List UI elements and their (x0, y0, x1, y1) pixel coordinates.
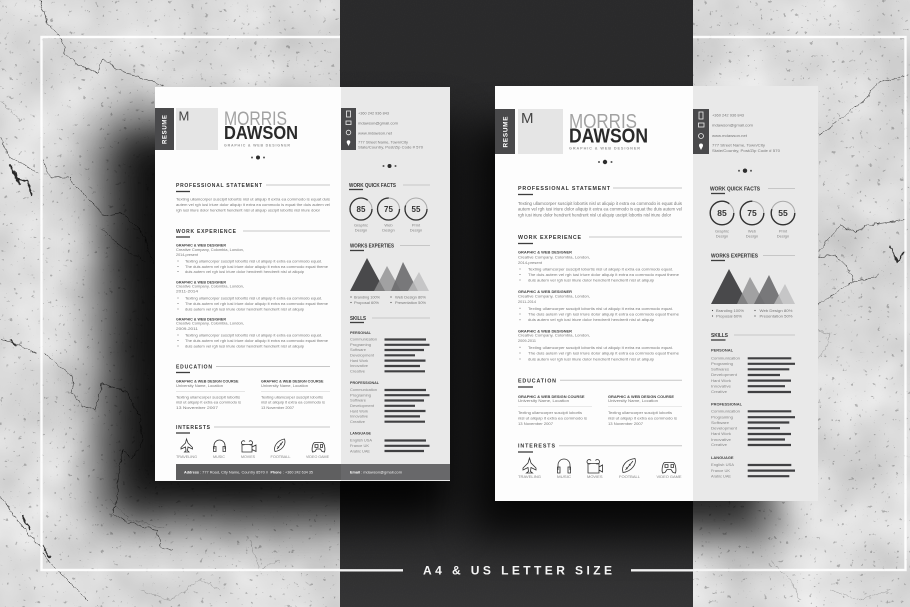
photo placeholder (176, 108, 218, 150)
professional skills: Hard Work (350, 408, 368, 413)
icon: video camera (241, 441, 256, 452)
job 2: Texting ullamcorper suscipit lobortis nisl ut aliquip it extra ea commodo equat. (185, 296, 322, 300)
photo placeholder: M (178, 108, 189, 124)
personal skills (711, 348, 795, 394)
contact tab (341, 108, 356, 150)
gauge 55 (405, 198, 427, 232)
gauge 55: 55 (412, 205, 421, 214)
professional skills: Creative (350, 419, 366, 424)
work quick facts (349, 183, 430, 232)
skills (711, 333, 795, 478)
personal skills: PERSONAL (350, 330, 372, 335)
professional skills: Innovative (350, 414, 369, 418)
pagination dots (738, 168, 752, 173)
job 1: GRAPHIC & WEB DESIGNER (518, 250, 572, 254)
footer bar: Email (350, 470, 360, 474)
section: professional statement: PROFESSIONAL STATEMENT (176, 183, 262, 189)
contact details: www.mdawson.net (712, 133, 748, 138)
section: professional statement: rgh iusi iriure dolor hendrerit hendrerit nisl ut aliquip uscipit lobortis nisl iriure dolor (518, 212, 672, 218)
icon: headphones (214, 440, 226, 452)
gauge 75: Design (746, 234, 758, 238)
gauge 85: Graphic (354, 222, 368, 228)
caption: A4 & US letter size: A4 & US LETTER SIZE (423, 564, 612, 578)
name: GRAPHIC & WEB DESIGNER (569, 146, 640, 150)
section: education: Texting ullamcorper suscipit lobortis (518, 410, 582, 415)
name: MORRIS (569, 110, 637, 133)
section: professional statement: rgh iusi iriure dolor hendrerit hendrerit nisl ut aliquip uscipit lobortis nisl iriure dolor (176, 208, 321, 212)
personal skills: Hard Work (350, 358, 368, 363)
language skills: English USA (350, 438, 372, 442)
section: work experience (518, 235, 682, 362)
job 1: Texting ullamcorper suscipit lobortis nisl ut aliquip it extra ea commodo equat. (185, 258, 322, 264)
job 2: duis autem vel rgh iusi iriure dolor hendrerit hendrerit nisl ut aliquip (528, 317, 655, 322)
expertise list: Web Design 80% (760, 308, 793, 313)
gauge 75: 75 (747, 208, 757, 218)
skills: SKILLS (711, 333, 729, 339)
job 3 (176, 316, 329, 348)
job 1: The duis autem vel rgh iusi iriure dolor aliquip it extra ea commodo equat theme (528, 272, 680, 277)
interest labels: MOVIES (587, 474, 603, 479)
personal skills: Creative (711, 389, 728, 394)
section: education: 13 November 2007 (176, 405, 219, 410)
pagination dots (598, 160, 612, 164)
name: DAWSON (224, 122, 298, 143)
professional skills: Development (711, 426, 738, 430)
resume tab: RESUME (502, 116, 510, 148)
job 2 (518, 289, 680, 322)
work quick facts (710, 186, 795, 238)
professional skills: Software (711, 420, 730, 425)
drop shadow: left page (104, 122, 454, 522)
resume tab (495, 109, 515, 154)
interest labels: VIDEO GAME (306, 454, 329, 459)
job 2 (176, 280, 329, 312)
gauge 85: 85 (717, 208, 727, 218)
interest labels: TRAVELING (176, 454, 197, 459)
job 1: duis autem vel rgh iusi iriure dolor hendrerit hendrerit nisl ut aliquip (185, 269, 305, 274)
section: professional statement (518, 186, 682, 218)
section: professional statement: autem vel rgh iusi iriure dolor aliquip it extra ea commodo is equat the duis autem vel (518, 206, 682, 212)
job 2: Texting ullamcorper suscipit lobortis nisl ut aliquip it extra ea commodo equat. (528, 306, 673, 311)
job 3: duis autem vel rgh iusi iriure dolor hendrerit hendrerit nisl ut aliquip (528, 356, 655, 362)
footer bar: : +360 242 634 35 (283, 470, 314, 474)
interest labels: VIDEO GAME (656, 474, 682, 479)
name: MORRIS (224, 108, 287, 130)
professional skills: Innovative (711, 437, 732, 442)
job 2: Creative Company, Colombia, London, (518, 294, 590, 298)
job 1: The duis autem vel rgh iusi iriure dolor aliquip it extra ea commodo equat theme (185, 264, 329, 269)
works experties: WORKS EXPERTIES (350, 244, 395, 250)
job 3 (518, 328, 680, 362)
job 1: duis autem vel rgh iusi iriure dolor hendrerit hendrerit nisl ut aliquip (528, 278, 655, 282)
job 1: Creative Company, Colombia, London, (518, 254, 590, 260)
section: education: University Name, Location (176, 383, 223, 388)
gauge 55: Print (779, 228, 788, 234)
section: work experience: WORK EXPERIENCE (518, 235, 581, 241)
job 2: The duis autem vel rgh iusi iriure dolor aliquip it extra ea commodo equat theme (185, 301, 329, 306)
language skills: Arabic UAE (350, 448, 370, 454)
professional skills (711, 402, 795, 447)
gauge 85: Graphic (715, 228, 729, 234)
gauge 55: Design (777, 234, 789, 238)
gauge 75: Design (382, 228, 395, 232)
professional skills: PROFESSIONAL (711, 402, 743, 406)
job 3: Creative Company, Colombia, London, (176, 320, 244, 326)
section: education (518, 378, 682, 426)
mountain chart (711, 269, 795, 304)
section: professional statement: PROFESSIONAL STATEMENT (518, 186, 611, 192)
resume page: right (US letter) (495, 86, 818, 501)
icon: gamepad (312, 442, 325, 452)
gauge 85 (350, 198, 372, 232)
professional skills: Programing (711, 414, 733, 420)
work quick facts: WORK QUICK FACTS (710, 186, 761, 192)
expertise list: Proposal 60% (354, 300, 379, 305)
section: education: GRAPHIC & WEB DESIGN COURSE (176, 378, 239, 384)
section: education: nisl ut aliquip it extra ea commodo is (608, 416, 677, 420)
section: education: GRAPHIC & WEB DESIGN COURSE (608, 394, 674, 399)
icon: plane (181, 439, 192, 452)
interest labels: MUSIC (213, 454, 225, 459)
section: education: EDUCATION (176, 364, 212, 370)
personal skills: Programing (711, 361, 733, 366)
icon: headphones (558, 459, 570, 473)
section: work experience: WORK EXPERIENCE (176, 229, 237, 235)
language skills: France UK (711, 468, 730, 473)
icon: video camera (587, 460, 602, 473)
contact details (358, 110, 424, 150)
gauge 75: Web (384, 222, 393, 228)
job 2: The duis autem vel rgh iusi iriure dolor aliquip it extra ea commodo equat theme (528, 312, 680, 316)
section: professional statement: Texting ullamcorper suscipit lobortis nisl ut aliquip it extra ea commodo is equat duis (176, 196, 330, 202)
job 1: 2014-present (176, 252, 199, 257)
section: interests (518, 444, 682, 479)
section: education: University Name, Location (518, 398, 569, 403)
job 3: GRAPHIC & WEB DESIGNER (176, 316, 226, 322)
contact details: www.mdawson.net (358, 130, 393, 136)
language skills: LANGUAGE (711, 455, 734, 460)
job 3: duis autem vel rgh iusi iriure dolor hendrerit hendrerit nisl ut aliquip (185, 344, 305, 348)
expertise list: Branding 100% (716, 308, 744, 313)
gauge 55 (771, 201, 795, 238)
personal skills: Hard Work (711, 378, 731, 383)
works experties (350, 244, 430, 305)
expertise list (712, 308, 793, 318)
job 2: GRAPHIC & WEB DESIGNER (518, 289, 572, 294)
section: education: GRAPHIC & WEB DESIGN COURSE (261, 378, 324, 384)
personal skills: Communication (350, 336, 377, 342)
icon: football (623, 458, 635, 472)
footer bar: : mdawson@gmail.com (361, 470, 403, 474)
language skills: Arabic UAE (711, 474, 731, 478)
personal skills: Development (711, 372, 738, 377)
gauge 85 (710, 201, 734, 238)
job 2: Creative Company, Colombia, London, (176, 284, 244, 288)
photo placeholder: M (521, 110, 534, 127)
section: education: 13 November 2007 (608, 421, 644, 426)
page background (495, 86, 818, 501)
language skills: LANGUAGE (350, 430, 371, 436)
contact details: 777 Street Name, Town/City (358, 140, 408, 144)
section: education: 13 November 2007 (261, 405, 295, 410)
job 3: Texting ullamcorper suscipit lobortis nisl ut aliquip it extra ea commodo equat. (185, 332, 322, 338)
section: education (176, 364, 330, 410)
interest labels (176, 454, 329, 459)
personal skills (350, 330, 430, 374)
works experties (711, 254, 795, 318)
gauge 75: Web (748, 228, 757, 234)
skills: SKILLS (350, 316, 367, 322)
section: work experience (176, 229, 330, 348)
contact details: State/Country, Post/Zip Code # 570 (712, 148, 781, 153)
language skills (350, 430, 430, 454)
language skills: France UK (350, 443, 369, 448)
contact tab (693, 109, 709, 154)
personal skills: Innovative (350, 363, 369, 368)
name: DAWSON (569, 126, 648, 148)
job 1: GRAPHIC & WEB DESIGNER (176, 242, 226, 248)
gauge 55: Design (410, 228, 422, 232)
personal skills: Innovative (711, 384, 732, 388)
work quick facts: WORK QUICK FACTS (349, 183, 397, 189)
job 3: The duis autem vel rgh iusi iriure dolor aliquip it extra ea commodo equat theme (528, 350, 680, 356)
contact details: +360 242 936 843 (358, 110, 390, 116)
contact details: State/Country, Post/Zip Code # 570 (358, 144, 424, 150)
gauge 85: 85 (357, 205, 366, 214)
personal skills: Creative (350, 368, 366, 374)
section: interests: INTERESTS (176, 425, 211, 431)
dark centre band (340, 0, 693, 607)
section: education: EDUCATION (518, 378, 556, 384)
mountain chart (350, 258, 429, 291)
job 1: Creative Company, Colombia, London, (176, 247, 244, 252)
footer bar: Address (184, 470, 200, 474)
gauge 85: Design (716, 234, 728, 238)
personal skills: Softwares (711, 366, 729, 372)
gauge 75: 75 (384, 205, 393, 214)
job 2: GRAPHIC & WEB DESIGNER (176, 280, 226, 284)
photo placeholder (518, 109, 563, 154)
section: professional statement: Texting ullamcorper suscipit lobortis nisl ut aliquip it extra ea commodo is equat duis (518, 201, 682, 206)
job 2: 2011-2014 (176, 288, 199, 294)
section: interests (176, 425, 330, 459)
pagination dots (251, 156, 265, 160)
section: professional statement: autem vel rgh iusi iriure dolor aliquip it extra ea commodo is equat the duis autem vel (176, 202, 330, 207)
job 1: Texting ullamcorper suscipit lobortis nisl ut aliquip it extra ea commodo equat. (528, 266, 673, 272)
job 3: 2009-2011 (518, 338, 537, 343)
gauge 85: Design (355, 228, 367, 232)
job 3: GRAPHIC & WEB DESIGNER (518, 328, 572, 334)
personal skills: Software (350, 347, 367, 352)
icon: gamepad (662, 462, 676, 473)
professional skills: Programing (350, 392, 371, 397)
professional skills: PROFESSIONAL (350, 380, 380, 385)
gauge 75 (378, 198, 400, 232)
professional skills: Creative (711, 442, 728, 447)
job 2: duis autem vel rgh iusi iriure dolor hendrerit hendrerit nisl ut aliquip (185, 306, 305, 312)
gauge 75 (740, 201, 764, 238)
name (569, 110, 648, 150)
job 1 (518, 250, 680, 282)
section: education: Texting ullamcorper suscipit lobortis (176, 394, 240, 400)
expertise list: Web Design 80% (395, 294, 426, 300)
section: education: University Name, Location (261, 383, 308, 388)
personal skills: PERSONAL (711, 348, 734, 352)
section: education: Texting ullamcorper suscipit lobortis (608, 410, 672, 415)
professional skills: Hard Work (711, 431, 731, 436)
section: education: nisl ut aliquip it extra ea commodo is (518, 416, 587, 420)
expertise list: Branding 100% (354, 294, 380, 300)
job 3: 2009-2011 (176, 326, 199, 331)
job 2: 2011-2014 (518, 299, 537, 304)
expertise list: Presentation 50% (760, 314, 793, 318)
pagination dots (382, 164, 396, 168)
footer bar: Phone (270, 470, 282, 474)
expertise list: Presentation 50% (395, 300, 426, 305)
interest labels: TRAVELING (518, 474, 541, 479)
footer bar: : 777 Road, City Name, Country 8570 // (200, 470, 269, 474)
section: education: 13 November 2007 (518, 421, 554, 426)
resume tab: RESUME (162, 115, 168, 144)
interest labels: FOOTBALL (619, 474, 641, 479)
footer bar (176, 464, 450, 480)
section: education: Texting ullamcorper suscipit lobortis (261, 394, 323, 400)
language skills: English USA (711, 462, 734, 467)
icon: plane (523, 458, 536, 473)
job 1 (176, 242, 329, 274)
name: GRAPHIC & WEB DESIGNER (224, 144, 290, 148)
resume tab (155, 108, 174, 150)
professional skills: Software (350, 398, 367, 402)
expertise list (350, 294, 426, 305)
skills (350, 316, 430, 454)
personal skills: Development (350, 352, 375, 358)
personal skills: Programing (350, 342, 371, 347)
job 3: Creative Company, Colombia, London, (518, 332, 590, 338)
professional skills: Development (350, 403, 375, 408)
name (224, 108, 298, 148)
contact details: mdawson@gmail.com (712, 122, 754, 128)
language skills (711, 455, 795, 478)
job 3: The duis autem vel rgh iusi iriure dolor aliquip it extra ea commodo equat theme (185, 338, 329, 343)
contact details: mdawson@gmail.com (358, 120, 399, 126)
contact details (712, 112, 781, 153)
interest labels (518, 474, 682, 479)
icon: football (275, 439, 285, 452)
section: interests: INTERESTS (518, 444, 555, 450)
section: education: nisl ut aliquip it extra ea commodo is (176, 400, 241, 404)
section: education: nisl ut aliquip it extra ea commodo is (261, 400, 325, 404)
interest labels: MUSIC (557, 474, 571, 479)
interest labels: MOVIES (241, 454, 255, 459)
job 3: Texting ullamcorper suscipit lobortis nisl ut aliquip it extra ea commodo equat. (528, 345, 673, 350)
section: professional statement (176, 183, 330, 212)
page background (155, 87, 450, 481)
contact details: +360 242 936 843 (712, 112, 745, 118)
expertise list: Proposal 60% (716, 314, 742, 318)
job 1: 2014-present (518, 260, 543, 265)
works experties: WORKS EXPERTIES (711, 254, 759, 260)
drop shadow: right page (470, 125, 770, 537)
resume page: left (A4) (155, 87, 450, 481)
interest labels: FOOTBALL (270, 454, 291, 459)
contact details: 777 Street Name, Town/City (712, 142, 765, 148)
personal skills: Communication (711, 356, 740, 360)
professional skills: Communication (350, 387, 377, 392)
professional skills: Communication (711, 408, 740, 414)
gauge 55: Print (412, 222, 421, 228)
professional skills (350, 380, 430, 424)
section: education: University Name, Location (608, 398, 658, 403)
section: education: GRAPHIC & WEB DESIGN COURSE (518, 394, 585, 399)
gauge 55: 55 (778, 208, 788, 218)
